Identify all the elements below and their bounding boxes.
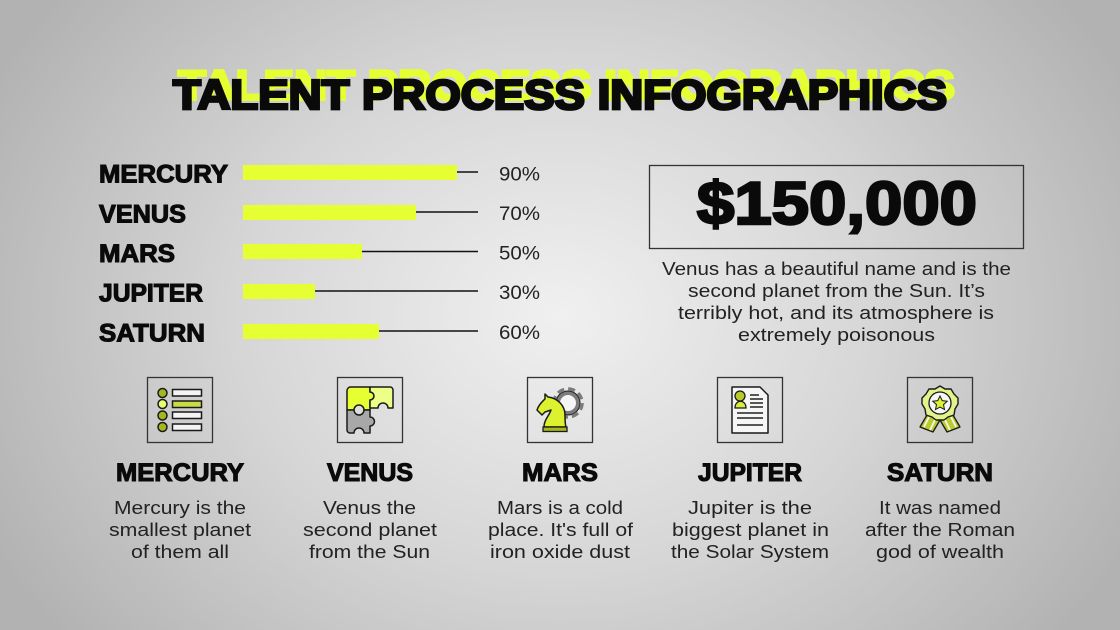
callout: amount: $150,000 [697,170,977,237]
column: Saturn: SATURN [887,459,993,487]
column: Saturn [865,459,1015,562]
column: Saturn: It was named [879,498,1001,518]
bar row: Mars: MARS [99,240,175,268]
bar row: Mercury: 90% [499,164,540,186]
bar row: Venus: VENUS [99,200,186,228]
title: TALENT PROCESS INFOGRAPHICS [178,62,955,108]
column: Venus: Venus the [323,498,416,518]
icon: award medal [908,378,972,442]
bar row: Mercury: MERCURY [99,160,228,188]
bar row: Jupiter: 30% [499,283,540,304]
column: Mercury: Mercury is the [114,498,246,518]
text block: Venus description: Venus has a beautiful name and is the [662,259,1011,279]
column: Venus: from the Sun [309,542,430,562]
column: Mercury [109,459,251,562]
bar row: Mercury [99,160,540,188]
column: Saturn: after the Roman [865,520,1015,540]
column: Saturn: god of wealth [876,542,1004,562]
bar row: Saturn: SATURN [99,320,205,348]
column: Venus [303,459,437,562]
column: Mars: MARS [522,459,598,487]
text block: Venus description: second planet from the Sun. It’s [688,281,985,301]
icon: checklist [148,378,212,442]
column: Mars: Mars is a cold [497,498,623,518]
text block: Venus description: terribly hot, and its atmosphere is [678,303,994,323]
text block: Venus description [662,259,1011,345]
column: Mars: place. It's full of [488,520,634,540]
bar row: Saturn: 60% [499,323,540,344]
callout: amount [650,166,1024,248]
bar row: Jupiter: JUPITER [99,280,203,308]
bar row: Mars: 50% [499,244,540,264]
bar chart [99,160,540,348]
column: Jupiter: JUPITER [698,459,802,487]
text block: Venus description: extremely poisonous [738,325,935,345]
column: Jupiter: biggest planet in [672,520,829,540]
icon: chess knight and gear [528,378,592,442]
bar row: Mars [99,240,540,268]
bar row: Venus [99,200,540,228]
title: TALENT PROCESS INFOGRAPHICS [173,71,947,118]
column: Venus: VENUS [327,459,413,487]
column: Mars: iron oxide dust [490,542,630,562]
column: Mercury: of them all [131,542,229,562]
column: Jupiter: the Solar System [671,542,829,562]
column: Jupiter: Jupiter is the [688,498,812,518]
bar row: Saturn [99,320,540,348]
icon: puzzle [338,378,402,442]
column: Jupiter [671,459,829,562]
column: Mercury: MERCURY [116,459,244,487]
bar row: Venus: 70% [499,204,540,225]
bar row: Jupiter [99,280,540,308]
column: Venus: second planet [303,520,437,540]
column: Mercury: smallest planet [109,520,251,540]
icon: resume document [718,378,782,442]
column: Mars [488,459,634,562]
